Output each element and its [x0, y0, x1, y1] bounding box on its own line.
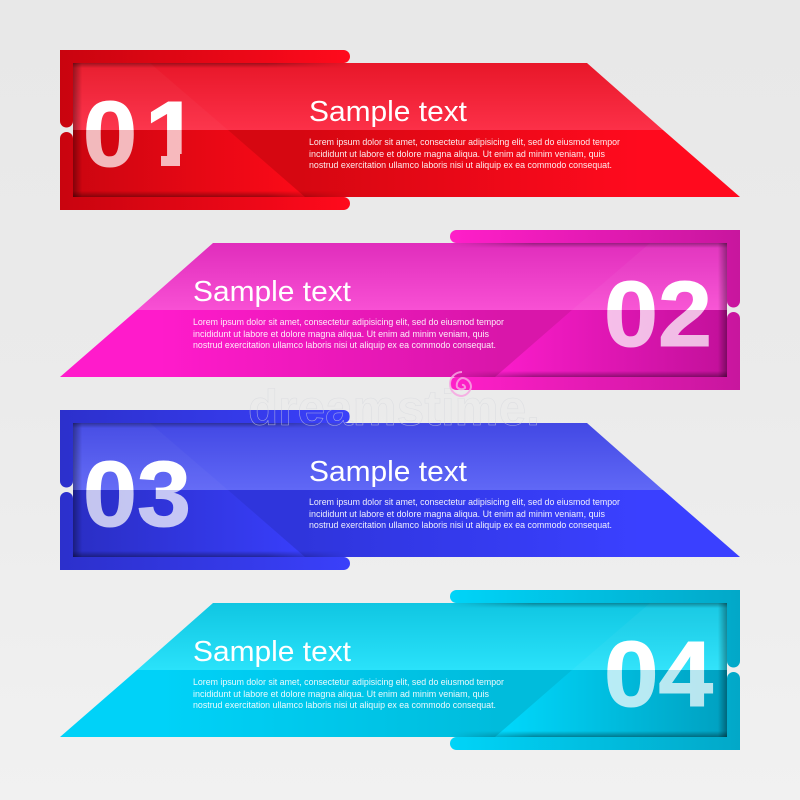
number 04: 04 [604, 622, 713, 726]
body text 3: nostrud exercitation ullamco laboris nisi ut aliquip ex ea commodo consequat. [309, 520, 612, 530]
body text 4: incididunt ut labore et dolore magna aliqua. Ut enim ad minim veniam, quis [193, 689, 489, 699]
frame 1 [60, 50, 350, 210]
ribbon 3 [73, 423, 740, 557]
number 04: 04 [604, 622, 713, 726]
body text 3: Lorem ipsum dolor sit amet, consectetur adipisicing elit, sed do eiusmod tempor [309, 497, 620, 507]
banner 3: blue [60, 410, 740, 570]
number 01: 01 [83, 83, 199, 186]
frame 4 [450, 590, 740, 750]
watermark swirl [450, 372, 471, 396]
ribbon 2 [60, 243, 727, 377]
body text 1 [309, 137, 620, 170]
banner 4: cyan [60, 590, 740, 750]
number 03 [86, 460, 188, 528]
ribbon 4 [60, 603, 727, 737]
body text 2: nostrud exercitation ullamco laboris nisi ut aliquip ex ea commodo consequat. [193, 340, 496, 350]
body text 3: incididunt ut labore et dolore magna aliqua. Ut enim ad minim veniam, quis [309, 509, 605, 519]
frame 3 [60, 410, 350, 570]
body text 2: Lorem ipsum dolor sit amet, consectetur adipisicing elit, sed do eiusmod tempor [193, 317, 504, 327]
body text 4 [193, 677, 504, 710]
body text 1: nostrud exercitation ullamco laboris nisi ut aliquip ex ea commodo consequat. [309, 160, 612, 170]
number 01: 01 [83, 83, 199, 186]
watermark: dreamstime. [248, 380, 540, 436]
banner 2: magenta [60, 230, 740, 390]
heading 4: Sample text [193, 636, 351, 668]
number 03: 03 [83, 442, 191, 546]
heading 1: Sample text [309, 96, 467, 128]
body text 4: Lorem ipsum dolor sit amet, consectetur adipisicing elit, sed do eiusmod tempor [193, 677, 504, 687]
body text 4: nostrud exercitation ullamco laboris nisi ut aliquip ex ea commodo consequat. [193, 700, 496, 710]
number 03: 03 [83, 442, 191, 546]
ribbon 1 [73, 63, 740, 197]
heading 2: Sample text [193, 276, 351, 308]
body text 2 [193, 317, 504, 350]
number 02 [607, 280, 709, 348]
number 04 [607, 640, 714, 708]
number 01 [86, 100, 182, 168]
body text 3 [309, 497, 620, 530]
body text 1: Lorem ipsum dolor sit amet, consectetur adipisicing elit, sed do eiusmod tempor [309, 137, 620, 147]
number 02: 02 [604, 262, 712, 366]
body text 1: incididunt ut labore et dolore magna aliqua. Ut enim ad minim veniam, quis [309, 149, 605, 159]
body text 2: incididunt ut labore et dolore magna aliqua. Ut enim ad minim veniam, quis [193, 329, 489, 339]
number 02: 02 [604, 262, 712, 366]
heading 3: Sample text [309, 456, 467, 488]
banner 1: red [60, 50, 740, 210]
frame 2 [450, 230, 740, 390]
